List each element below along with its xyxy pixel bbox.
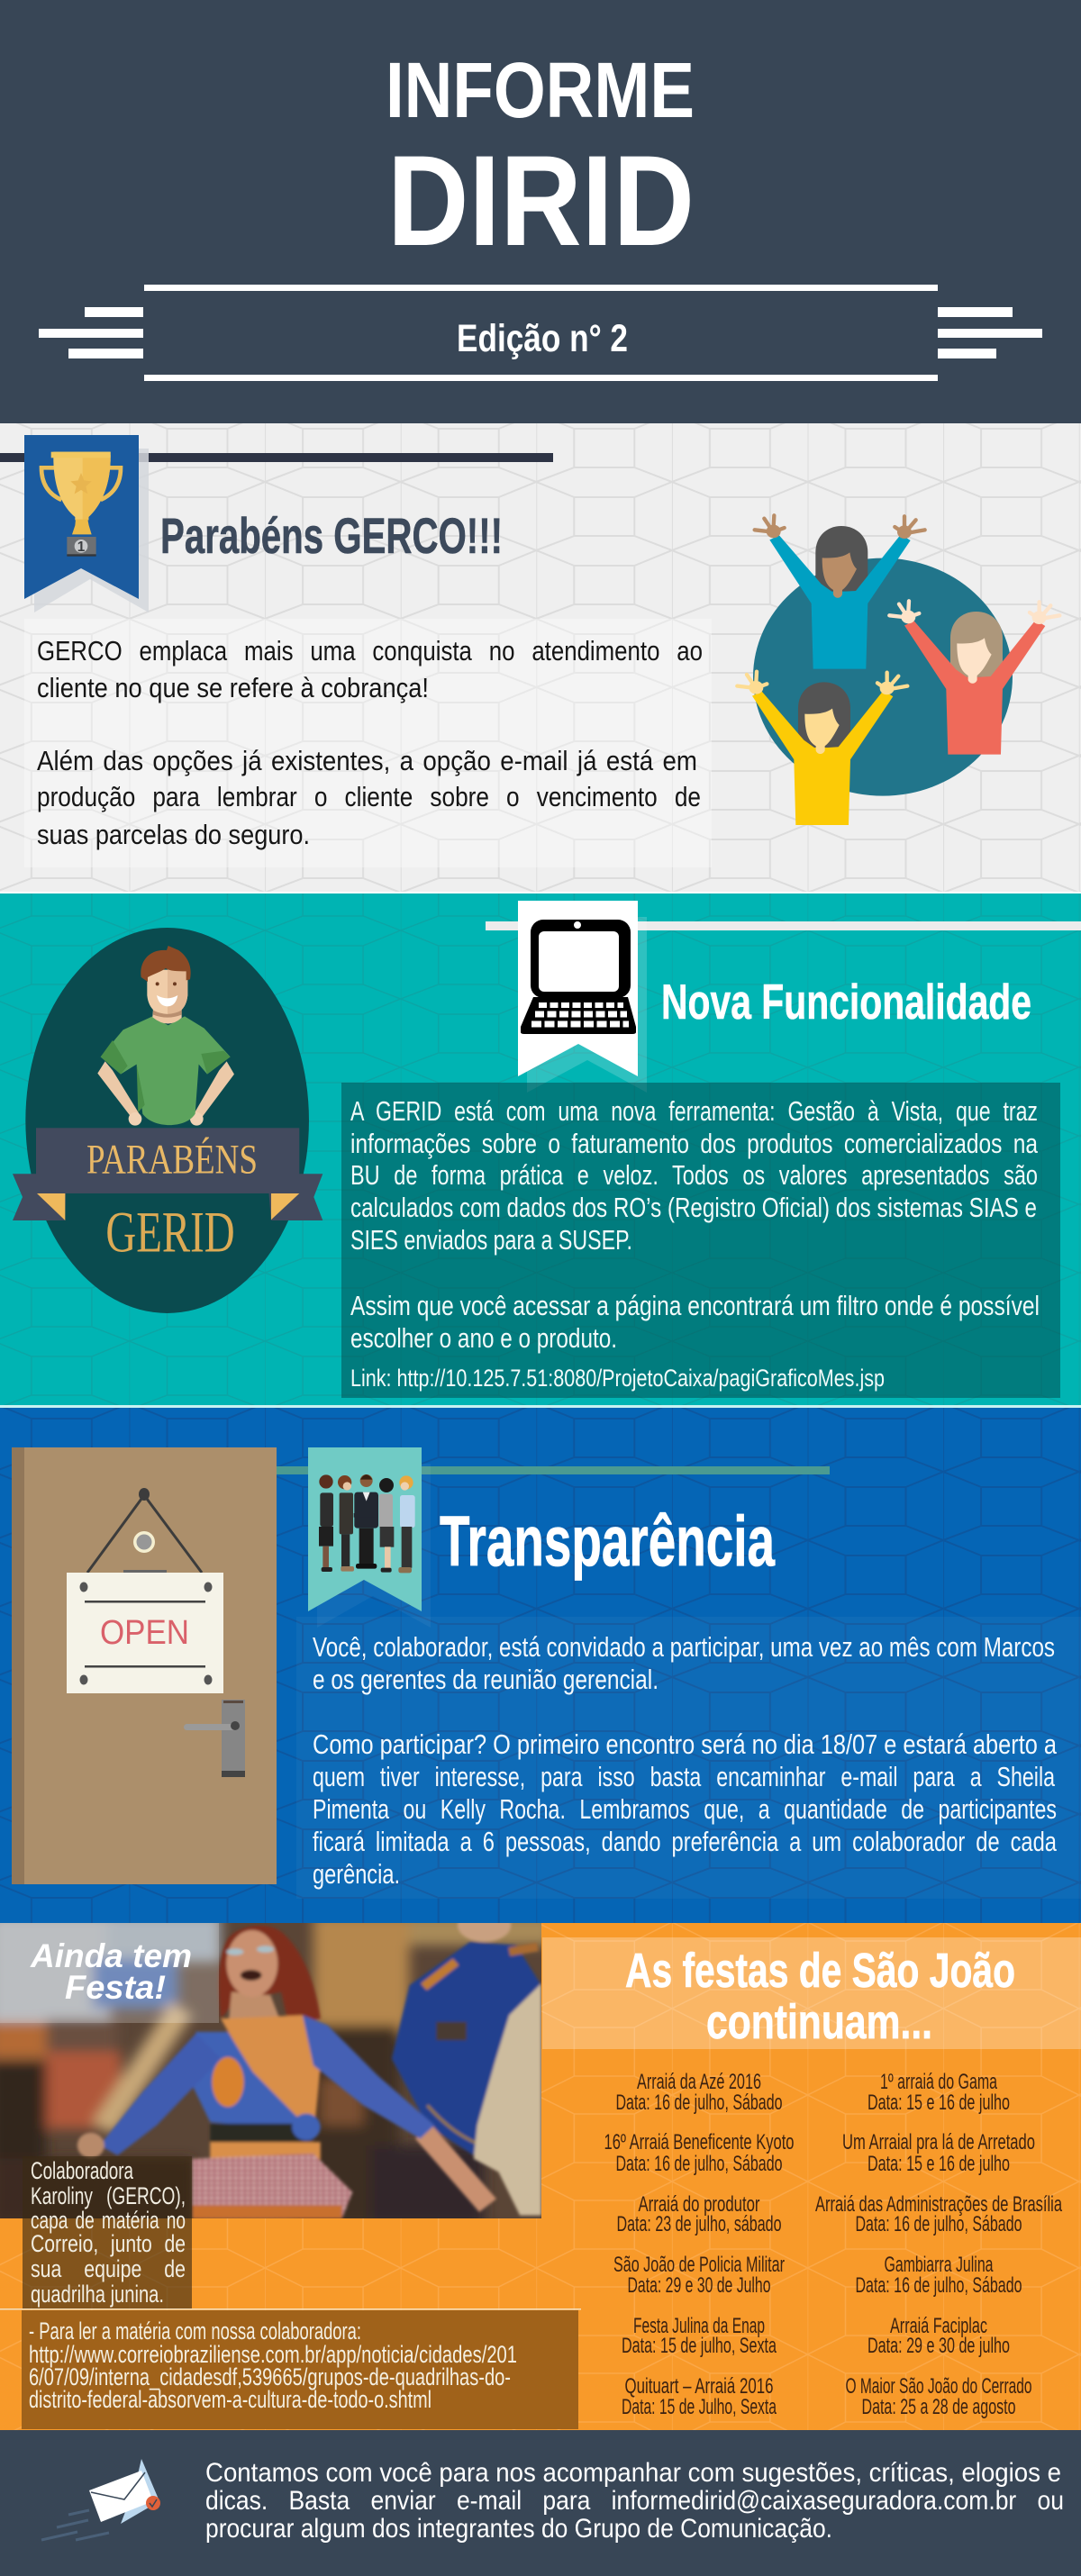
- events list: right column: Arraiá Faciplac: [890, 2314, 987, 2338]
- dark rule: [0, 453, 553, 462]
- edition frame lines: [39, 285, 1042, 381]
- text backdrop: [24, 619, 712, 867]
- photo heading: Ainda tem: [30, 1937, 192, 1974]
- events list: left column: Festa Julina da Enap: [633, 2314, 765, 2338]
- body text: [350, 1095, 1040, 1392]
- ribbon: [24, 435, 139, 599]
- events list: left column: Data: 23 de julho, sábado: [616, 2212, 782, 2236]
- title: continuam...: [706, 1995, 932, 2049]
- events list: left column: Arraiá da Azé 2016: [637, 2070, 761, 2094]
- body text: escolher o ano e o produto.: [350, 1322, 617, 1354]
- ribbon: [518, 901, 638, 1076]
- sign text: OPEN: [100, 1614, 189, 1652]
- events list: right column: [815, 2070, 1062, 2419]
- badge text: GERID: GERID: [105, 1199, 235, 1264]
- title: INFORME: INFORME: [386, 47, 695, 134]
- events list: left column: Arraiá do produtor: [638, 2192, 760, 2217]
- door handle: [184, 1700, 245, 1777]
- ribbon shadow: [34, 449, 149, 612]
- footer text: [205, 2458, 1064, 2544]
- body text: gerência.: [313, 1858, 400, 1890]
- panel: Transparência: [0, 1405, 1081, 1923]
- body text: GERCO emplaca mais uma conquista no atendimento ao: [37, 635, 703, 667]
- title backdrop: [542, 1937, 1081, 2049]
- caption text: capa de matéria no: [31, 2207, 186, 2234]
- link box: [0, 2308, 581, 2429]
- badge text: PARABÉNS: PARABÉNS: [86, 1137, 258, 1184]
- icon: trophy: 1: [77, 540, 86, 555]
- body text: Link: http://10.125.7.51:8080/ProjetoCaixa/pagiGraficoMes.jsp: [350, 1365, 885, 1392]
- events list: right column: Data: 29 e 30 de julho: [868, 2334, 1010, 2358]
- body text: e os gerentes da reunião gerencial.: [313, 1664, 659, 1695]
- events list: right column: 1º arraiá do Gama: [880, 2070, 997, 2094]
- heading: Transparência: [440, 1501, 776, 1581]
- caption box: [23, 2156, 192, 2308]
- events list: left column: Data: 15 de Julho, Sexta: [622, 2395, 777, 2419]
- body text: produção para lembrar o cliente sobre o vencimento de: [37, 781, 701, 812]
- photo heading: [30, 1937, 192, 2006]
- events list: left column: Data: 16 de julho, Sábado: [616, 2091, 782, 2115]
- events list: right column: Gambiarra Julina: [885, 2253, 994, 2277]
- icon: trophy: [41, 452, 121, 557]
- body text: [37, 635, 703, 850]
- events list: right column: Data: 15 e 16 de julho: [868, 2152, 1010, 2176]
- events list: left column: Data: 29 e 30 de Julho: [627, 2273, 771, 2298]
- footer text: procurar algum dos integrantes do Grupo de Comunicação.: [205, 2514, 832, 2544]
- rule: [277, 1466, 830, 1474]
- icon: laptop: [521, 920, 636, 1034]
- link text: - Para ler a matéria com nossa colaboradora:: [29, 2317, 361, 2345]
- events list: left column: São João de Policia Militar: [613, 2253, 785, 2277]
- events list: left column: Data: 15 de julho, Sexta: [622, 2334, 777, 2358]
- title: DIRID: DIRID: [387, 130, 695, 273]
- caption text: sua equipe de: [31, 2255, 186, 2282]
- panel: festas de São João: [0, 1909, 1081, 2430]
- body text: cliente no que se refere à cobrança!: [37, 672, 429, 703]
- text backdrop: [296, 1617, 1081, 1899]
- caption text: Colaboradora: [31, 2157, 134, 2184]
- photo heading: Festa!: [65, 1969, 166, 2006]
- events list: left column: 16º Arraiá Beneficente Kyoto: [604, 2130, 795, 2154]
- events list: left column: Data: 16 de julho, Sábado: [616, 2152, 782, 2176]
- icon: group of colleagues: [319, 1474, 415, 1573]
- events list: right column: Data: 15 e 16 de julho: [868, 2091, 1010, 2115]
- caption text: Karoliny (GERCO),: [31, 2182, 186, 2209]
- icon: flying envelope: [41, 2459, 160, 2540]
- man: [97, 946, 234, 1126]
- caption text: [31, 2157, 186, 2308]
- events list: left column: Quituart – Arraiá 2016: [625, 2374, 773, 2399]
- heading: Parabéns GERCO!!!: [160, 507, 503, 564]
- body text: SIES enviados para a SUSEP.: [350, 1224, 632, 1256]
- illustration: door with open sign: [12, 1447, 277, 1884]
- link text: [29, 2317, 517, 2413]
- body text: [313, 1631, 1058, 1890]
- caption text: quadrilha junina.: [31, 2281, 164, 2308]
- title: [625, 1944, 1015, 2049]
- rule: [486, 921, 1081, 930]
- footer: [0, 2430, 1081, 2576]
- photo overlay: [0, 1923, 219, 2023]
- panel: Nova Funcionalidade: [0, 892, 1081, 1405]
- link text: http://www.correiobraziliense.com.br/app/noticia/cidades/201: [29, 2341, 517, 2368]
- link text: 6/07/09/interna_cidadesdf,539665/grupos-de-quadrilhas-do-: [29, 2363, 511, 2390]
- body text: suas parcelas do seguro.: [37, 819, 310, 850]
- caption text: Correio, junto de: [31, 2230, 186, 2257]
- body text: Além das opções já existentes, a opção e-mail já está em: [37, 745, 697, 776]
- illustration: three people celebrating: [737, 515, 1059, 825]
- panel: Parabéns GERCO: [0, 423, 1081, 893]
- link text: distrito-federal-absorvem-a-cultura-de-todo-o.shtml: [29, 2386, 431, 2413]
- banner: [13, 1128, 322, 1220]
- photo: quadrilha dancer: [0, 1909, 552, 2226]
- text panel: [341, 1083, 1060, 1398]
- events list: left column: [604, 2070, 795, 2419]
- ribbon shadow: [317, 1464, 431, 1628]
- ribbon: [308, 1447, 422, 1611]
- edition label: Edição n° 2: [457, 317, 628, 360]
- header: [0, 0, 1081, 423]
- ribbon shadow: [527, 917, 647, 1093]
- badge: Parabéns GERID: [13, 928, 322, 1313]
